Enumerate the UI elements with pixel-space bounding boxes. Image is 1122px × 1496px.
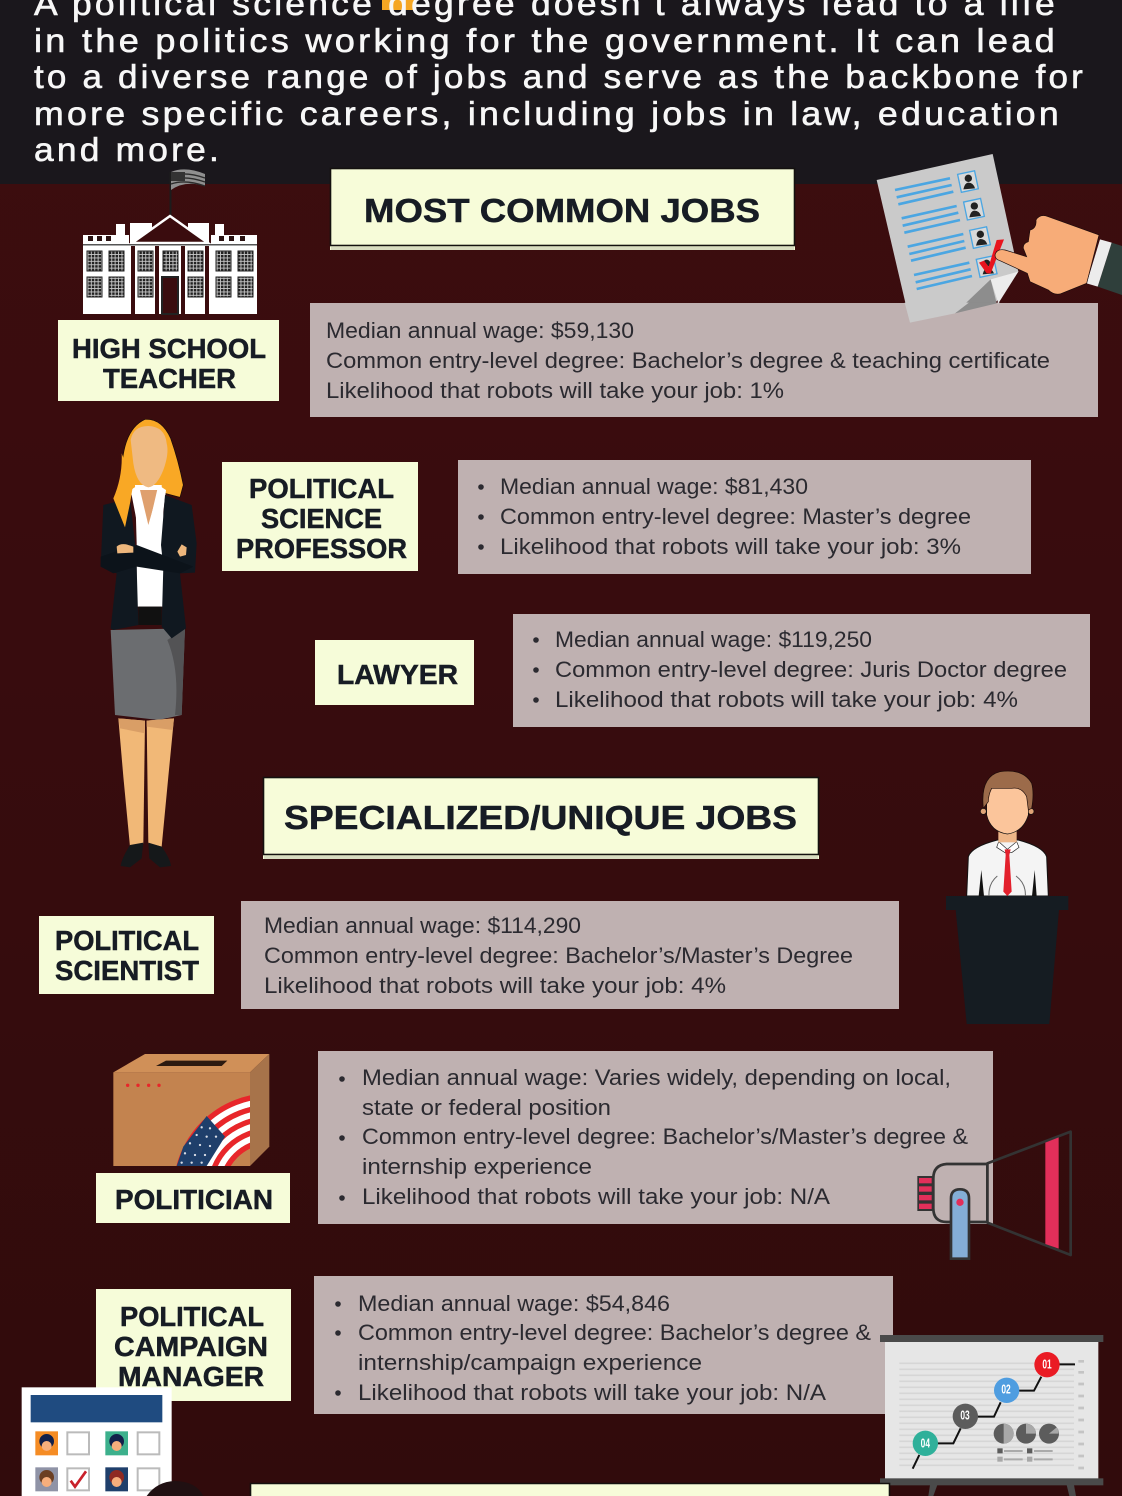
label: politician: POLITICIAN	[115, 1184, 273, 1215]
heading: most common jobs: MOST COMMON JOBS	[364, 193, 760, 230]
label: political scientist	[39, 916, 214, 994]
panel: politician stats	[318, 1051, 993, 1224]
panel: political scientist stats: Likelihood that robots will take your job: 4%	[264, 973, 726, 998]
label: high school teacher: TEACHER	[103, 363, 236, 394]
intro text	[34, 0, 1086, 168]
intro text: and more.	[34, 131, 222, 168]
panel: politician stats: Likelihood that robots will take your job: N/A	[362, 1184, 830, 1209]
icon: presentation board chart: 04	[921, 1436, 930, 1450]
icon: megaphone	[917, 1132, 1071, 1259]
icon: presentation board chart	[880, 1335, 1103, 1496]
intro text: to a diverse range of jobs and serve as the backbone for	[34, 58, 1086, 95]
panel: professor stats: Common entry-level degree: Master’s degree	[500, 504, 971, 529]
heading: specialized jobs: SPECIALIZED/UNIQUE JOBS	[284, 800, 797, 837]
panel: campaign manager stats	[314, 1276, 893, 1414]
intro text: more specific careers, including jobs in law, education	[34, 95, 1062, 132]
panel: professor stats: Median annual wage: $81,430	[500, 474, 808, 499]
panel: campaign manager stats: Median annual wage: $54,846	[358, 1291, 670, 1316]
panel: professor stats: Likelihood that robots will take your job: 3%	[500, 534, 961, 559]
panel: politician stats: state or federal position	[362, 1095, 611, 1120]
icon: ballot box with flag	[113, 1054, 270, 1166]
icon: presentation board chart: 02	[1001, 1383, 1011, 1397]
panel: lawyer stats: Median annual wage: $119,250	[555, 627, 872, 652]
label: campaign manager	[96, 1289, 291, 1401]
panel: high school teacher stats: Common entry-level degree: Bachelor’s degree & teaching certificate	[326, 348, 1050, 373]
panel: high school teacher stats: Median annual wage: $59,130	[326, 318, 634, 343]
label: lawyer: LAWYER	[337, 659, 458, 690]
panel: political scientist stats: Common entry-level degree: Bachelor’s/Master’s Degree	[264, 943, 853, 968]
label: political scientist: POLITICAL	[55, 925, 199, 956]
icon: ballot paper and hand	[877, 154, 1122, 323]
heading: cut-off bottom section	[250, 1483, 890, 1496]
intro text: in the politics working for the government. It can lead	[34, 22, 1058, 59]
label: political science professor: POLITICAL	[249, 473, 394, 504]
heading: specialized jobs	[263, 777, 819, 859]
panel: political scientist stats	[241, 901, 899, 1009]
panel: politician stats: Common entry-level degree: Bachelor’s/Master’s degree &	[362, 1124, 968, 1149]
label: political science professor	[222, 462, 418, 571]
label: political scientist: SCIENTIST	[55, 955, 199, 986]
icon: woman in suit	[101, 419, 197, 867]
panel: high school teacher stats: Likelihood that robots will take your job: 1%	[326, 378, 784, 403]
icon: school building with flag	[83, 169, 257, 314]
label: campaign manager: POLITICAL	[120, 1301, 264, 1332]
label: politician	[96, 1173, 290, 1223]
label: political science professor: PROFESSOR	[236, 533, 407, 564]
panel: political scientist stats: Median annual wage: $114,290	[264, 913, 581, 938]
icon: presentation board chart: 03	[960, 1409, 970, 1423]
panel: campaign manager stats: Common entry-level degree: Bachelor’s degree &	[358, 1320, 871, 1345]
icon: ballot card	[22, 1387, 203, 1496]
heading: most common jobs	[330, 168, 795, 250]
panel: politician stats: internship experience	[362, 1154, 592, 1179]
label: campaign manager: CAMPAIGN	[114, 1331, 268, 1362]
panel: high school teacher stats	[310, 303, 1098, 417]
label: lawyer	[315, 640, 474, 705]
panel: lawyer stats	[513, 614, 1090, 727]
panel: lawyer stats: Common entry-level degree: Juris Doctor degree	[555, 657, 1067, 682]
panel: campaign manager stats: Likelihood that robots will take your job: N/A	[358, 1380, 826, 1405]
label: high school teacher: HIGH SCHOOL	[72, 333, 266, 364]
ballot paper overlap	[905, 303, 1000, 323]
label: high school teacher	[58, 320, 279, 401]
label: campaign manager: MANAGER	[118, 1361, 264, 1392]
icon: presentation board chart: 01	[1042, 1358, 1052, 1372]
label: political science professor: SCIENCE	[261, 503, 382, 534]
panel: lawyer stats: Likelihood that robots will take your job: 4%	[555, 687, 1018, 712]
panel: professor stats	[458, 460, 1031, 574]
panel: campaign manager stats: internship/campaign experience	[358, 1350, 702, 1375]
icon: man at podium	[946, 771, 1068, 1024]
intro panel	[0, 0, 1122, 184]
panel: politician stats: Median annual wage: Varies widely, depending on local,	[362, 1065, 951, 1090]
